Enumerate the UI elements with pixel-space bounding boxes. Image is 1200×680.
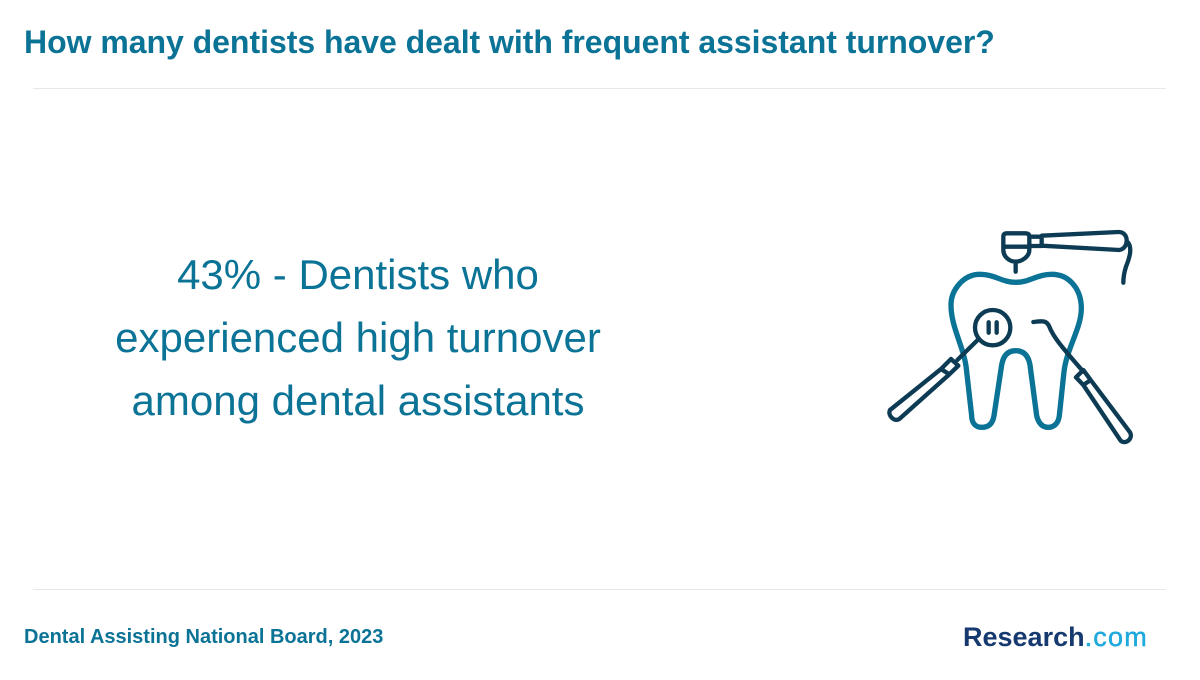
mirror xyxy=(975,310,1010,345)
icon: tooth with dental tools xyxy=(887,230,1133,444)
title: How many dentists have dealt with frequent assistant turnover? xyxy=(24,24,995,60)
drill xyxy=(1003,232,1130,283)
main statistic text xyxy=(115,251,601,424)
probe xyxy=(1033,321,1131,442)
tooth outline xyxy=(951,274,1081,427)
main statistic text: 43% - Dentists who xyxy=(177,251,539,298)
source: Dental Assisting National Board, 2023 xyxy=(24,626,383,648)
logo: Research.com: Research.com xyxy=(963,622,1148,652)
main statistic text: among dental assistants xyxy=(132,377,584,424)
main statistic text: experienced high turnover xyxy=(115,314,601,361)
dental tools xyxy=(889,232,1131,442)
